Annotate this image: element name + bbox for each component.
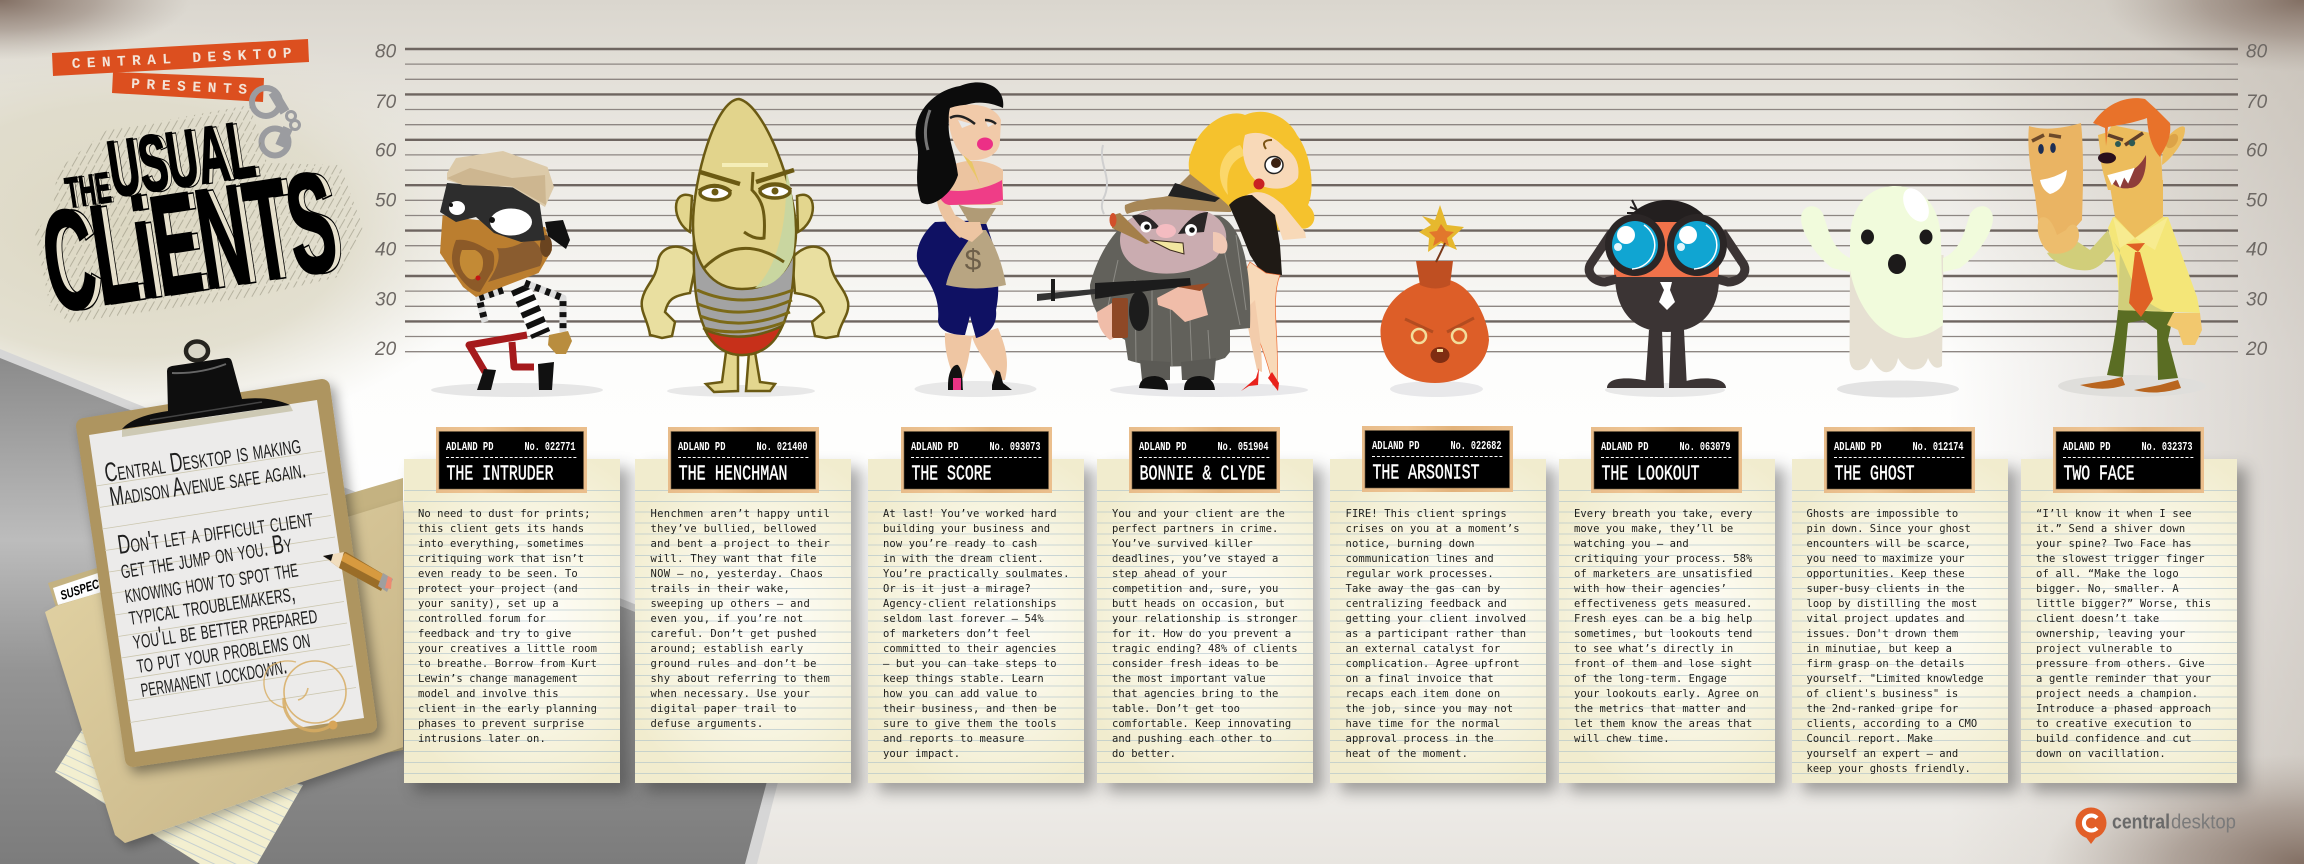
height scale right: 20 [2245, 339, 2268, 360]
title: the usual clients: THE [64, 164, 116, 218]
logo: central desktop: central [2112, 812, 2170, 834]
police tag: the lookout [1591, 427, 1742, 493]
clip [122, 342, 293, 437]
clipboard [84, 342, 393, 759]
height scale left [374, 42, 397, 360]
police tag: the henchman [668, 427, 819, 493]
clipboard paper [89, 400, 364, 752]
banner: presents: PRESENTS [131, 77, 248, 99]
clipboard handwriting: Madison Avenue safe again. [107, 453, 308, 512]
height scale left: 60 [375, 140, 397, 162]
panel: bonnie and clyde [1097, 427, 1332, 802]
height scale left: 80 [375, 42, 397, 62]
character: bonnie and clyde [1037, 112, 1314, 397]
text: the intruder: No need to dust for prints; this client gets its hands into everything, sometimes critiquing work that isn’t even ready to be seen. To protect your project (and your sanity), set up a controlled forum for feedback and try to give your creatives a little room to breathe. Borrow from Kurt Lewin’s change management model and involve this client in the early planning phases to prevent surprise intrusions later on. [418, 508, 597, 744]
height scale left: 70 [375, 92, 397, 113]
height scale right [2245, 42, 2268, 360]
clipboard board [84, 387, 369, 759]
title hatching [35, 105, 363, 323]
bonnie [1189, 112, 1314, 391]
coffee rings [264, 661, 346, 731]
character: the score: $ [965, 244, 982, 277]
height scale right: 60 [2246, 140, 2268, 162]
police tag: the arsonist [1362, 426, 1513, 492]
police tag: the score [901, 427, 1052, 493]
mask [2028, 123, 2083, 254]
clipboard handwriting: permanent lockdown. [138, 649, 289, 703]
title: the usual clients: CLiENTS [33, 142, 345, 343]
panel: the score [868, 427, 1102, 802]
panel: the henchman [635, 427, 870, 802]
height scale left: 50 [375, 190, 397, 212]
text: two face: “I’ll know it when I see it.” Send a shiver down your spine? Two Face has the slowest trigger finger of all. “Make the logo bigger. No, smaller. A little bigger?” Worse, this client doesn’t take ownership, leaving your project vulnerable to pressure from others. Give a gentle reminder that your project needs a champion. Introduce a phased approach to creative execution to build confidence and cut down on vacillation. [2036, 508, 2211, 760]
logo: central desktop: desktop [2171, 812, 2236, 834]
clyde [1037, 145, 1250, 390]
text: bonnie and clyde: You and your client are the perfect partners in crime. You’ve survived killer deadlines, you’ve stayed a step ahead of your competition and, sure, you butt heads on occasion, but your relationship is stronger for it. How do you prevent a tragic ending? 48% of clients consider fresh ideas to be the most important value that agencies bring to the table. Don’t get too comfortable. Keep innovating and pushing each other to do better. [1112, 508, 1298, 760]
clipboard handwriting [102, 429, 319, 703]
height scale right: 80 [2246, 42, 2268, 62]
panel: the lookout [1559, 427, 1794, 802]
banner: central desktop [52, 39, 309, 76]
folder back: SUSPECT [58, 574, 107, 603]
character: the score [914, 82, 1036, 397]
height scale right: 40 [2246, 240, 2268, 260]
height scale left: 30 [375, 290, 397, 310]
text: the lookout: Every breath you take, every move you make, they’ll be watching you — and critiquing your process. 58% of marketers are unsatisfied with how their agencies’ effectiveness gets measured. Fresh eyes can be a big help sometimes, but lookouts tend to see what’s directly in front of them and lose sight of the long-term. Engage your lookouts early. Agree on the metrics that matter and let them know the areas that will chew time. [1574, 508, 1759, 744]
title: the usual clients: USUAL [106, 104, 264, 214]
character: the henchman [642, 99, 848, 397]
tommy gun [1037, 278, 1191, 331]
title: the usual clients: THE [62, 164, 114, 218]
clipboard handwriting: to put your problems on [134, 623, 312, 679]
panel: the arsonist [1330, 426, 1564, 802]
police tag: the intruder: ADLAND PD [446, 441, 494, 454]
police tag: two face: TWO FACE [2064, 464, 2134, 486]
panel: the intruder [404, 427, 635, 798]
police tag: the score: THE SCORE [912, 464, 992, 486]
text: the henchman: Henchmen aren’t happy until they’ve bullied, bellowed and bent a project to their will. They want that file NOW — no, yesterday. Chaos trails in their wake, sweeping up others — and even you, if you’re not careful. Don’t get pushed around; establish early ground rules and don’t be shy about referring to them when necessary. Use your digital paper trail to defuse arguments. [650, 508, 830, 730]
clipboard handwriting: Central Desktop is making [102, 429, 303, 488]
text: the ghost: Ghosts are impossible to pin down. Since your ghost encounters will be scarce, you need to maximize your opportunities. Keep these super-busy clients in the loop by distilling the most vital project updates and issues. Don't drown them in minutiae, but keep a firm grasp on the details yourself. "Limited knowledge of client's business" is the 2nd-ranked gripe for clients, according to a CMO Council report. Make yourself an expert — and keep your ghosts friendly. [1806, 508, 1984, 774]
police tag: the henchman: ADLAND PD [678, 441, 726, 454]
grey desk [0, 349, 806, 864]
police tag: two face: ADLAND PD [2063, 441, 2111, 454]
police tag: the ghost: THE GHOST [1834, 464, 1914, 486]
police tag: the arsonist: ADLAND PD [1372, 440, 1420, 452]
clipboard handwriting: knowing how to spot the [122, 553, 300, 609]
clipboard handwriting: Don't let a difficult client [116, 502, 315, 560]
panel: two face [2021, 427, 2256, 801]
text: the score: At last! You’ve worked hard building your business and now you’re ready to cash in with the dream client. You’re practically soulmates. Or is it just a mirage? Agency-client relationships seldom last forever — 54% of marketers don’t feel committed to their agencies — but you can take steps to keep things stable. Learn how you can add value to their business, and then be sure to give them the tools and reports to measure your impact. [883, 508, 1070, 760]
police tag: the ghost [1824, 427, 1975, 493]
title: the usual clients: CLiENTS [39, 142, 351, 343]
lined sheet under folder [55, 730, 303, 864]
clipboard handwriting: you'll be better prepared [131, 599, 319, 655]
clipboard handwriting: get the jump on you. By [118, 528, 294, 584]
police tag: the lookout: THE LOOKOUT [1602, 464, 1700, 486]
police tag: the score: ADLAND PD [911, 441, 959, 454]
character: the arsonist [1380, 205, 1489, 397]
title: the usual clients [33, 103, 351, 344]
police tag: bonnie and clyde: ADLAND PD [1139, 441, 1187, 454]
title: the usual clients: USUAL [102, 104, 260, 214]
folder back [48, 478, 403, 800]
character: the ghost [1801, 184, 1993, 398]
panel: the ghost [1792, 427, 2026, 802]
height scale left: 20 [374, 339, 397, 360]
police tag: two face [2053, 427, 2204, 493]
clipboard handwriting: typical troublemakers, [126, 577, 297, 631]
height scale right: 50 [2246, 190, 2268, 212]
height scale right: 70 [2246, 92, 2268, 113]
icon: handcuffs [252, 88, 300, 156]
police tag: the lookout: ADLAND PD [1601, 441, 1649, 454]
banner: presents [112, 72, 264, 102]
height scale right: 30 [2246, 290, 2268, 310]
pencil [323, 552, 393, 592]
character: the lookout [1589, 200, 1745, 397]
height scale left: 40 [375, 240, 397, 260]
police tag: the intruder [436, 427, 587, 493]
police tag: the ghost: ADLAND PD [1834, 441, 1882, 454]
logo: central desktop [2076, 808, 2236, 844]
character: the intruder [431, 151, 603, 397]
character: two face [2028, 98, 2206, 397]
text: the arsonist: FIRE! This client springs crises on you at a moment’s notice, burning down communication lines and regular work processes. Take away the gas can by centralizing feedback and getting your client involved as a participant rather than an external catalyst for complication. Agree upfront on a final invoice that recaps each item done on the job, since you may not have time for the normal approval process in the heat of the moment. [1346, 508, 1526, 760]
banner: central desktop: CENTRAL DESKTOP [71, 46, 292, 73]
folder front [45, 500, 403, 843]
height chart lines [405, 49, 2238, 352]
police tag: bonnie and clyde [1129, 427, 1280, 493]
